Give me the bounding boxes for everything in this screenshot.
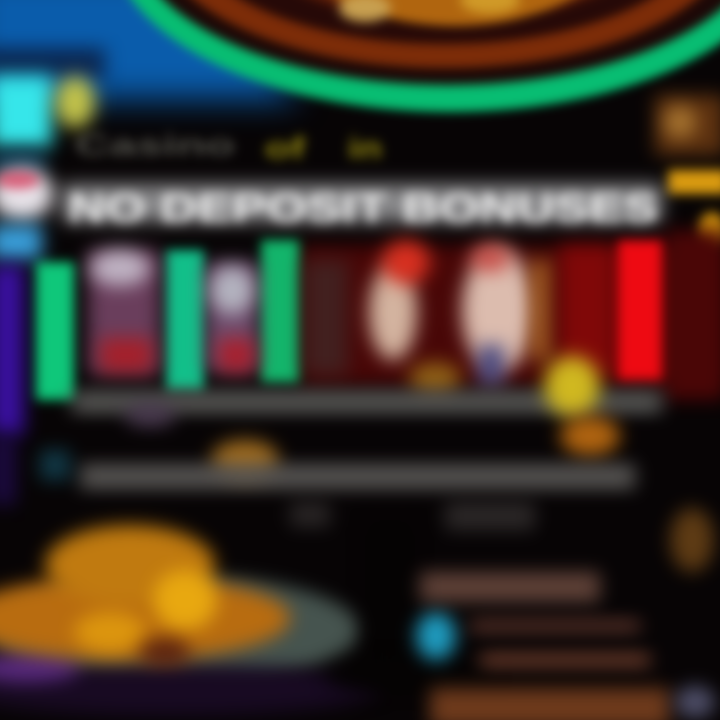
small heading: Casino	[75, 129, 235, 162]
left neon lights	[0, 75, 95, 505]
small heading	[75, 129, 382, 165]
gold accents	[124, 356, 620, 480]
bottom right floor stripes	[420, 572, 715, 720]
right gold decorations	[655, 95, 720, 248]
first caption band	[72, 391, 662, 413]
blue glass	[416, 612, 456, 660]
pale slot panels	[88, 250, 348, 375]
small heading: in	[348, 132, 382, 165]
slot machine row	[36, 230, 720, 400]
gold coin bowl	[0, 525, 380, 716]
table and dark post	[325, 520, 495, 695]
green neon bars	[36, 240, 299, 400]
top ceiling with green neon ring	[0, 0, 720, 112]
second caption band	[40, 450, 635, 530]
small heading: of	[265, 132, 306, 165]
main title: NO DEPOSIT BONUSES	[68, 184, 658, 231]
right side dim figure	[670, 508, 714, 572]
white and red pillars	[369, 240, 662, 394]
